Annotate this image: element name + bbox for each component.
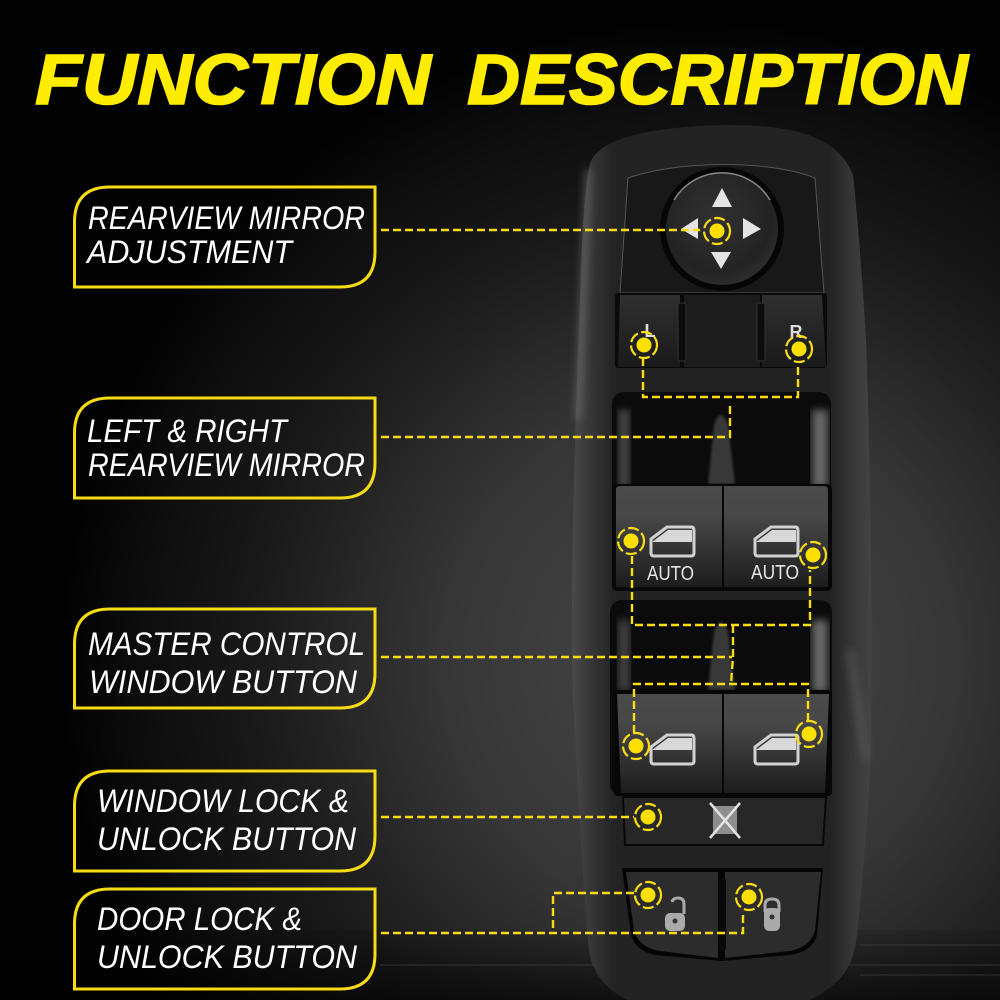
window lock button: [623, 797, 826, 845]
marker: rear right window: [796, 721, 822, 747]
callout: window lock and unlock button: WINDOW LOCK &: [97, 783, 349, 819]
marker: window lock: [635, 804, 661, 830]
marker: door lock: [736, 884, 762, 910]
switch body: [572, 125, 872, 1000]
callout: rearview mirror adjustment: [74, 187, 375, 287]
marker: right mirror: [786, 336, 812, 362]
marker: left mirror: [631, 332, 657, 358]
auto labels: AUTO: [647, 563, 694, 585]
left and right mirror selector: [615, 293, 827, 368]
callout: door lock and unlock button: DOOR LOCK &: [97, 901, 302, 937]
marker: front right window: [800, 542, 826, 568]
front window buttons: [612, 484, 832, 591]
left and right mirror selector: L: [644, 321, 656, 341]
left and right mirror selector: R: [790, 322, 802, 342]
marker: mirror adjustment: [704, 218, 730, 244]
callout: rearview mirror adjustment: ADJUSTMENT: [85, 234, 294, 270]
leader lines: [381, 230, 810, 933]
callout: master control window button: [74, 609, 375, 708]
mirror adjustment knob: [660, 167, 784, 291]
callout: window lock and unlock button: UNLOCK BUTTON: [97, 821, 357, 857]
callout: rearview mirror adjustment: REARVIEW MIRROR: [88, 200, 365, 236]
mirror adjustment recess: [620, 164, 824, 293]
icon: locked padlock: [764, 899, 780, 931]
title: DESCRIPTION: [467, 41, 970, 120]
device: window switch panel: [572, 125, 872, 1000]
callout: left and right rearview mirror: LEFT & RIGHT: [87, 413, 289, 449]
callout: master control window button: MASTER CONTROL: [88, 626, 365, 662]
rear window buttons: [614, 690, 832, 796]
door lock buttons: [622, 868, 823, 961]
callout: door lock and unlock button: [74, 889, 375, 989]
lower window well: [610, 600, 832, 796]
marker dots: [618, 218, 826, 910]
title: FUNCTION: [35, 41, 433, 120]
icon: rear left window: [651, 735, 694, 764]
icon: front left window: [651, 527, 694, 556]
marker: door unlock: [635, 882, 661, 908]
callout: left and right rearview mirror: REARVIEW MIRROR: [88, 447, 365, 483]
icon: front right window: [755, 527, 798, 556]
upper window well: [612, 392, 831, 590]
body edge highlights: [578, 170, 866, 760]
marker: rear left window: [623, 733, 649, 759]
title: [35, 41, 970, 120]
auto labels: [647, 562, 799, 585]
marker: front left window: [618, 528, 644, 554]
callout: master control window button: WINDOW BUTTON: [89, 664, 358, 700]
callout: left and right rearview mirror: [74, 398, 375, 498]
icon: unlocked padlock: [665, 898, 685, 931]
callout: door lock and unlock button: UNLOCK BUTTON: [97, 939, 358, 975]
auto labels: AUTO: [751, 562, 799, 584]
icon: rear right window: [755, 735, 798, 764]
callout: window lock and unlock button: [74, 771, 375, 871]
